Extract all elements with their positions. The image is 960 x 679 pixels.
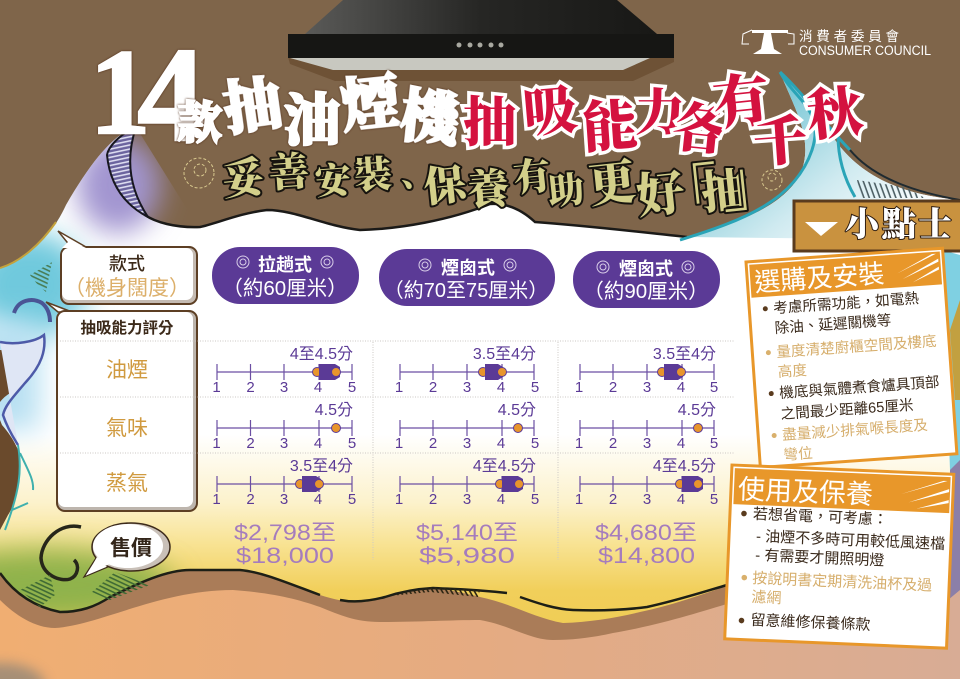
- title: white part: 1: [90, 25, 150, 160]
- chart: 拉趟式 氣味: 5: [348, 435, 356, 452]
- chart: 拉趟式 氣味: 1: [212, 435, 221, 452]
- panel: rating labels: [46, 302, 197, 511]
- banner arrow: [805, 222, 838, 236]
- chart: 拉趟式 蒸氣: 5: [348, 491, 356, 508]
- subtitle: 抽: [699, 164, 750, 219]
- heading 款式: 款式: [109, 254, 145, 274]
- chart: 煙囪式70-75 蒸氣: 2: [429, 491, 437, 508]
- bullet items: - 有需要才開照明燈: [755, 547, 885, 569]
- chart: 煙囪式70-75 油煙: 2: [429, 379, 437, 396]
- bottom outline of the paper: [0, 570, 727, 612]
- header stripes: [896, 254, 940, 283]
- swirl: [41, 526, 81, 580]
- logo mark: [752, 30, 788, 54]
- logo scales: [742, 30, 794, 44]
- title: white part: 油: [284, 91, 340, 153]
- subtitle: 養: [466, 166, 511, 215]
- decorative swirl: subtitle right: [762, 170, 782, 190]
- chart: 煙囪式90 氣味: 4: [677, 435, 685, 452]
- bullet items: 之間最少距離65厘米: [780, 396, 914, 423]
- banner: 小點士: [794, 201, 960, 251]
- price: 煙囪式90: $4,680至: [595, 520, 697, 545]
- heading 抽吸能力評分: 抽吸能力評分: [80, 318, 174, 337]
- header stripes: [900, 479, 950, 510]
- banner text: [845, 206, 952, 244]
- chart: 拉趟式 蒸氣: [212, 457, 356, 508]
- price: 煙囪式70-75: $5,140至: [416, 520, 518, 545]
- chart: 拉趟式 油煙: 2: [246, 379, 255, 396]
- price: 拉趟式: [234, 520, 336, 568]
- chart: 煙囪式70-75 氣味: 1: [395, 435, 403, 452]
- left blue scribble: [0, 335, 44, 445]
- hood canopy: [305, 0, 657, 34]
- chart: 煙囪式90 蒸氣: 5: [710, 491, 718, 508]
- price: 拉趟式: $2,798至: [234, 520, 336, 545]
- chart: 拉趟式 蒸氣: 3.5至4分: [290, 457, 353, 475]
- banner text: 點: [881, 206, 916, 244]
- bullet items: 按說明書定期清洗油杯及過: [752, 570, 932, 594]
- bullet items: 機底與氣體煮食爐具頂部: [779, 374, 940, 402]
- panel: 選購及安裝: [746, 248, 957, 467]
- subtitle: 好: [634, 167, 688, 224]
- heading 機身闊度: （機身闊度）: [64, 277, 190, 300]
- header title: 使用及保養: [737, 474, 873, 510]
- bullet items: 盡量減少排氣喉長度及: [782, 417, 929, 444]
- hood shadow: [288, 57, 674, 81]
- callout: 款式: [58, 231, 197, 304]
- chart: 拉趟式 油煙: 5: [348, 379, 356, 396]
- pill: 煙囪式 90: 煙囪式: [619, 259, 673, 279]
- chart: 煙囪式70-75 氣味: 2: [429, 435, 437, 452]
- callout: 售價: [84, 523, 170, 577]
- bullet items: 除油、延遲關機等: [774, 311, 892, 337]
- chart: 煙囪式90 油煙: [575, 345, 718, 396]
- title: red part: 抽: [463, 93, 517, 153]
- chart: 拉趟式 油煙: 4至4.5分: [290, 345, 353, 363]
- title: red part: 千: [751, 110, 809, 174]
- grey corner shadow: [0, 663, 45, 679]
- left curl: [14, 300, 50, 322]
- label 售價: 售價: [110, 537, 152, 560]
- chart: 拉趟式 油煙: 4: [314, 379, 322, 396]
- pill: 煙囪式 90: （約90厘米）: [583, 280, 709, 303]
- right edge decoration: [942, 250, 960, 480]
- chart: 煙囪式70-75 油煙: [395, 345, 539, 396]
- chart: 煙囪式70-75 氣味: 3: [463, 435, 471, 452]
- chart: 拉趟式 蒸氣: 4: [314, 491, 322, 508]
- pill: 煙囪式 70-75: [379, 249, 555, 306]
- hood buttons: [456, 42, 504, 48]
- chart: 拉趟式 蒸氣: 1: [212, 491, 221, 508]
- pill: 拉趟式: （約60厘米）: [222, 277, 348, 300]
- subtitle: 裝: [353, 154, 393, 198]
- chart: 煙囪式90 氣味: 1: [575, 435, 583, 452]
- chart: 煙囪式70-75 蒸氣: 5: [531, 491, 539, 508]
- bottom-left hatch: [20, 572, 150, 607]
- row label 油煙: 油煙: [106, 359, 148, 382]
- title: white part: 煙: [338, 69, 403, 140]
- bullet items: - 油煙不多時可用較低風速檔: [756, 527, 945, 553]
- title: red part: 有: [709, 67, 774, 138]
- left hatch: [30, 262, 52, 292]
- chart: 煙囪式90 油煙: 2: [609, 379, 617, 396]
- row label 蒸氣: 蒸氣: [106, 472, 148, 495]
- title: white part: 款: [178, 99, 222, 148]
- chart: 煙囪式70-75 蒸氣: [395, 457, 539, 508]
- chart: 煙囪式70-75 油煙: 4: [497, 379, 505, 396]
- price: 煙囪式70-75: $5,980: [419, 543, 515, 568]
- right spike outlines: [680, 72, 855, 240]
- title: white part: 4: [137, 21, 205, 170]
- title: white part: [90, 21, 465, 170]
- top outline of the paper: [145, 204, 687, 237]
- bullet items: [736, 505, 946, 637]
- chart: 煙囪式70-75 油煙: 1: [395, 379, 403, 396]
- logo Chinese name: 消費者委員會: [799, 29, 900, 44]
- row label 氣味: 氣味: [106, 417, 148, 440]
- chart: 拉趟式 蒸氣: 3: [280, 491, 288, 508]
- chart: 煙囪式70-75 氣味: 5: [531, 435, 539, 452]
- title: red part: 秋: [804, 81, 866, 149]
- left yellow edge line: [0, 222, 56, 268]
- title: white part: 抽: [220, 70, 286, 143]
- chart: 拉趟式 氣味: 2: [246, 435, 255, 452]
- chart: 拉趟式 油煙: 3: [280, 379, 288, 396]
- logo: Consumer Council: [742, 29, 931, 58]
- subtitle: 「: [651, 159, 722, 236]
- chart: 煙囪式90 蒸氣: 3: [643, 491, 651, 508]
- chart: 煙囪式70-75 油煙: 5: [531, 379, 539, 396]
- price: 煙囪式90: [595, 520, 697, 568]
- chart: 拉趟式 氣味: 4.5分: [315, 401, 353, 419]
- subtitle: 有: [511, 155, 553, 201]
- hood filter: [290, 58, 650, 70]
- bullet items: 留意維修保養條款: [750, 611, 871, 634]
- chart: 煙囪式90 蒸氣: 4: [677, 491, 685, 508]
- chart: 煙囪式90 油煙: 3.5至4分: [653, 345, 716, 363]
- chart: 煙囪式70-75 油煙: 3.5至4分: [473, 345, 536, 363]
- chart: 煙囪式90 油煙: 5: [710, 379, 718, 396]
- left spike hatching: [107, 127, 148, 217]
- banner text: 士: [918, 206, 952, 244]
- bullet items: 高度: [777, 362, 808, 381]
- right edge purple: [948, 460, 960, 600]
- right edge yellow: [950, 300, 960, 400]
- chart: 煙囪式90 油煙: 3: [643, 379, 651, 396]
- title: red part: 各: [670, 97, 730, 163]
- range hood: [288, 0, 674, 81]
- right spike dark hatch: [857, 180, 925, 198]
- chart: 煙囪式90 蒸氣: [575, 457, 718, 508]
- decorative swirl: subtitle left: [184, 158, 214, 188]
- chart: 煙囪式70-75 氣味: 4.5分: [498, 401, 536, 419]
- pill: 拉趟式: [212, 247, 359, 304]
- right spike edge: [850, 150, 960, 200]
- chart: 煙囪式90 蒸氣: 2: [609, 491, 617, 508]
- chart: 煙囪式90 蒸氣: 1: [575, 491, 583, 508]
- right spike: [687, 72, 960, 240]
- bullet items: 考慮所需功能，如電熱: [773, 290, 920, 317]
- chart: 煙囪式90 氣味: 5: [710, 435, 718, 452]
- counter shadow band: [0, 570, 760, 640]
- title: red part: 力: [635, 85, 685, 141]
- left teal vines: [5, 445, 33, 530]
- chart: 煙囪式70-75 油煙: 3: [463, 379, 471, 396]
- chart: 煙囪式90 油煙: 4: [677, 379, 685, 396]
- chart: 拉趟式 油煙: [212, 345, 356, 396]
- chart: 煙囪式90 氣味: [575, 401, 718, 452]
- chart: 煙囪式70-75 蒸氣: 4至4.5分: [473, 457, 536, 475]
- subtitle: [220, 143, 789, 236]
- left colour washes: [0, 137, 175, 621]
- subtitle: 保: [422, 161, 472, 212]
- subtitle: 更: [586, 156, 639, 213]
- chart: 拉趟式 氣味: 3: [280, 435, 288, 452]
- title: red part: 能: [580, 95, 640, 161]
- bullet items: 量度清楚廚櫃空間及樓底: [776, 332, 937, 361]
- title: red part: [463, 67, 866, 174]
- chart: 煙囪式90 蒸氣: 4至4.5分: [653, 457, 716, 475]
- pill: 拉趟式: 拉趟式: [258, 254, 312, 275]
- header band: [733, 468, 951, 513]
- chart: 煙囪式70-75 蒸氣: 3: [463, 491, 471, 508]
- header band: [749, 251, 942, 298]
- subtitle: 妥: [220, 154, 267, 205]
- chart: 煙囪式90 氣味: 3: [643, 435, 651, 452]
- header title: 選購及安裝: [753, 258, 885, 297]
- chart: 煙囪式70-75 蒸氣: 1: [395, 491, 403, 508]
- price: 煙囪式90: $14,800: [598, 543, 695, 568]
- chart: 煙囪式90 氣味: 4.5分: [678, 401, 716, 419]
- subtitle: 、: [401, 157, 435, 194]
- chart: 拉趟式 油煙: 1: [212, 379, 221, 396]
- hood front bar: [288, 34, 674, 58]
- left edge brown strips: [0, 350, 27, 530]
- bullet items: [762, 289, 944, 465]
- pill: 煙囪式 90: [573, 251, 720, 308]
- bullet items: 濾網: [751, 589, 782, 607]
- chart: 拉趟式 氣味: 4: [314, 435, 322, 452]
- background: peach counter: [0, 575, 960, 679]
- price: 煙囪式70-75: [416, 520, 518, 568]
- subtitle: 」: [718, 143, 789, 220]
- yellow hatch on the lower edge: [390, 587, 480, 597]
- pill: 煙囪式 70-75: （約70至75厘米）: [384, 279, 548, 302]
- title: white part: 機: [398, 83, 465, 154]
- chart: 煙囪式90 氣味: 2: [609, 435, 617, 452]
- bullet items: 彎位: [783, 445, 813, 464]
- banner text: 小: [845, 207, 883, 244]
- subtitle: 助: [546, 169, 586, 213]
- chart: 煙囪式90 油煙: 1: [575, 379, 583, 396]
- title: red part: 吸: [521, 80, 580, 144]
- chart: 煙囪式70-75 氣味: [395, 401, 539, 452]
- chart: 煙囪式70-75 氣味: 4: [497, 435, 505, 452]
- price: 拉趟式: $18,000: [236, 543, 334, 568]
- chart: 拉趟式 蒸氣: 2: [246, 491, 255, 508]
- subtitle: 善: [268, 149, 311, 196]
- panel: 使用及保養: [725, 465, 954, 648]
- bullet items: 若想省電，可考慮：: [753, 506, 888, 529]
- pill: 煙囪式 70-75: 煙囪式: [441, 258, 495, 278]
- chart: 煙囪式70-75 蒸氣: 4: [497, 491, 505, 508]
- chart: 拉趟式 氣味: [212, 401, 356, 452]
- logo English name: CONSUMER COUNCIL: [799, 43, 931, 58]
- subtitle: 安: [314, 160, 353, 202]
